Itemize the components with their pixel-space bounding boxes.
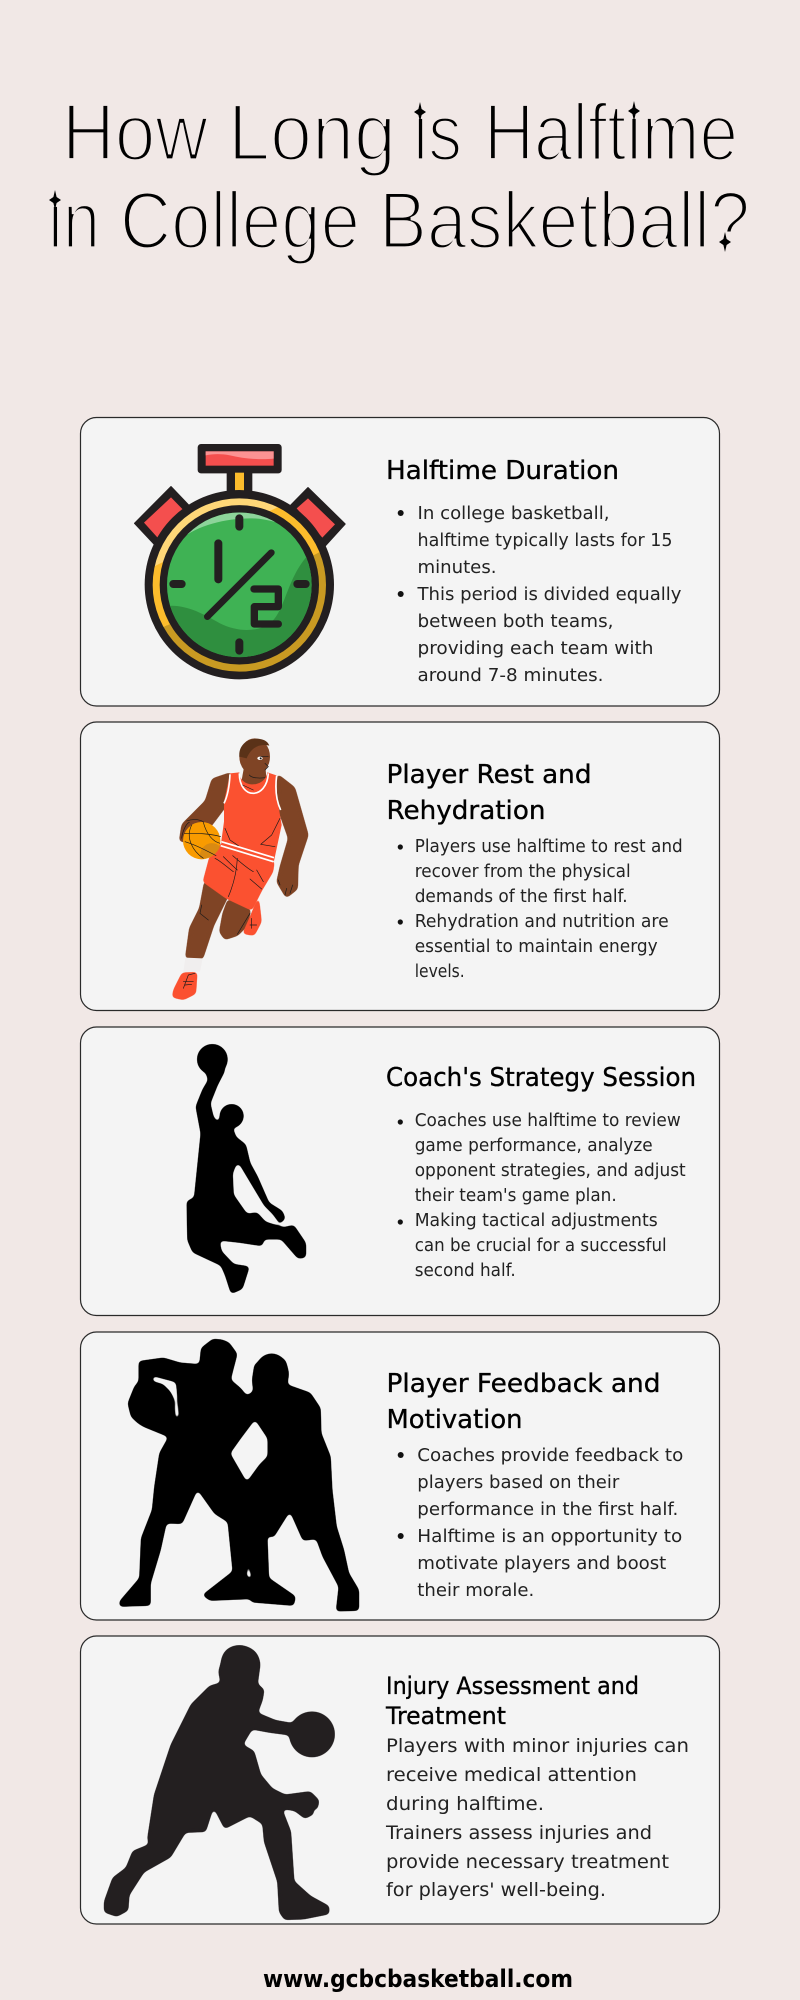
- bullet list: duration: This period is divided equally: [416, 585, 682, 605]
- panel: player feedback and motivation: [80, 1332, 720, 1620]
- bullet list: rest: essential to maintain energy: [415, 937, 658, 957]
- bullet list: strategy: their team's game plan.: [415, 1186, 617, 1206]
- bullet list: feedback: performance in the first half.: [417, 1500, 678, 1520]
- panel: player rest and rehydration: [80, 722, 720, 1010]
- heading: player rest and rehydration: [386, 760, 592, 826]
- text block: injury care: during halftime.: [386, 1793, 544, 1815]
- icon: silhouette of two players guarding: [120, 1339, 358, 1611]
- bullet list: feedback: Coaches provide feedback to: [417, 1446, 683, 1466]
- bullet list: feedback: motivate players and boost: [417, 1554, 666, 1574]
- bullet list: duration: [398, 504, 682, 686]
- heading: injury assessment and treatment: Injury Assessment and: [386, 1672, 639, 1700]
- icon: stopwatch showing one half: [135, 444, 345, 679]
- heading: coach's strategy session: Coach's Strategy Session: [386, 1063, 696, 1093]
- bullet list: strategy: game performance, analyze: [415, 1136, 653, 1156]
- bullet list: feedback: Halftime is an opportunity to: [417, 1527, 682, 1547]
- bullet list: strategy: second half.: [415, 1261, 516, 1281]
- bullet list: duration: halftime typically lasts for 15: [418, 531, 672, 551]
- title: Long: [228, 88, 396, 178]
- title: Basketball?: [379, 176, 750, 266]
- footer: website url: www.gcbcbasketball.com: [263, 1965, 573, 1993]
- bullet list: duration: In college basketball,: [418, 504, 610, 524]
- title: [46, 88, 750, 266]
- heading: injury assessment and treatment: [385, 1672, 639, 1730]
- heading: halftime duration: Halftime Duration: [386, 456, 619, 486]
- bullet list: duration: around 7-8 minutes.: [418, 666, 604, 686]
- text block: injury care: Players with minor injuries can: [386, 1735, 689, 1757]
- title: in: [48, 176, 100, 266]
- title: is: [413, 88, 462, 178]
- title: College: [120, 176, 360, 266]
- text block: injury care: Trainers assess injuries and: [385, 1822, 652, 1844]
- panel: coach's strategy session: [80, 1027, 720, 1316]
- bullet list: duration: between both teams,: [418, 612, 614, 632]
- heading: player feedback and motivation: [386, 1369, 660, 1435]
- panel: halftime duration: [80, 418, 720, 706]
- bullet list: feedback: their morale.: [417, 1581, 534, 1601]
- text block: injury care: for players' well-being.: [386, 1879, 606, 1901]
- bullet list: strategy: Coaches use halftime to review: [415, 1111, 681, 1131]
- bullet list: rest: Players use halftime to rest and: [415, 837, 683, 857]
- heading: player rest and rehydration: Player Rest and: [386, 760, 592, 790]
- title: Halftime: [484, 88, 738, 178]
- bullet list: strategy: opponent strategies, and adjust: [415, 1161, 686, 1181]
- text block: injury care: [385, 1735, 689, 1901]
- text block: injury care: receive medical attention: [386, 1764, 637, 1786]
- title: How: [62, 88, 208, 178]
- bullet list: rest: Rehydration and nutrition are: [415, 912, 669, 932]
- heading: player rest and rehydration: Rehydration: [386, 796, 546, 826]
- heading: player feedback and motivation: Player Feedback and: [386, 1369, 660, 1399]
- text block: injury care: provide necessary treatment: [386, 1851, 669, 1873]
- bullet list: rest: levels.: [415, 962, 465, 982]
- bullet list: rest: [398, 837, 683, 982]
- panel: injury assessment and treatment: [80, 1636, 720, 1924]
- icon: silhouette of player dunking: [188, 1045, 305, 1293]
- bullet list: strategy: can be crucial for a successful: [415, 1236, 667, 1256]
- bullet list: strategy: Making tactical adjustments: [415, 1211, 658, 1231]
- heading: player feedback and motivation: Motivation: [386, 1405, 522, 1435]
- bullet list: rest: recover from the physical: [415, 862, 631, 882]
- bullet list: feedback: [398, 1446, 683, 1601]
- bullet list: duration: providing each team with: [418, 639, 654, 659]
- illustration: player dribbling in orange kit: [173, 738, 307, 999]
- bullet list: strategy: [398, 1111, 686, 1281]
- bullet list: feedback: players based on their: [417, 1473, 620, 1493]
- bullet list: duration: minutes.: [418, 558, 496, 578]
- bullet list: rest: demands of the first half.: [415, 887, 628, 907]
- icon: silhouette of player dribbling: [105, 1646, 335, 1919]
- heading: injury assessment and treatment: Treatment: [385, 1702, 506, 1730]
